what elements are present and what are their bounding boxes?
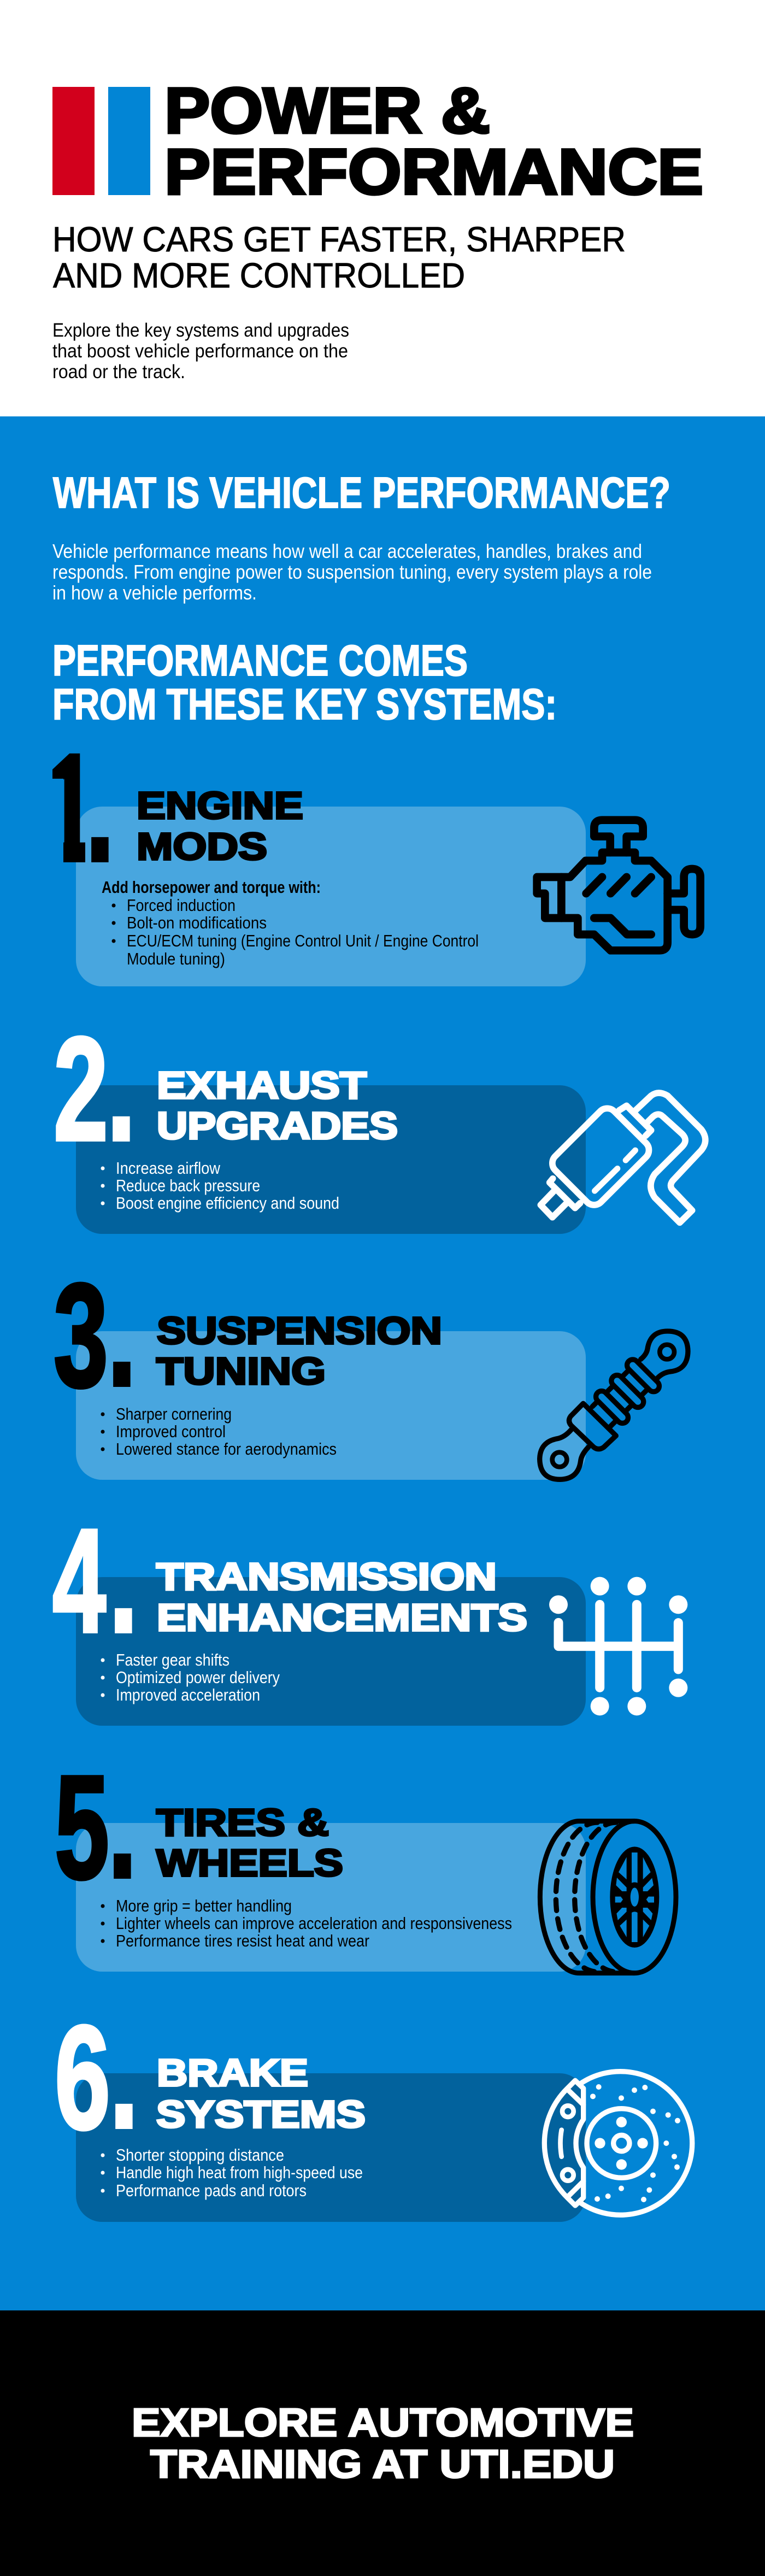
heading: transmission enhancements: [156, 1555, 527, 1639]
footer band: [0, 2310, 765, 2576]
suspension text: Sharper cornering: [116, 1404, 232, 1424]
title: [164, 75, 703, 208]
heading: engine mods: MODS: [137, 825, 267, 868]
engine text: ECU/ECM tuning (Engine Control Unit / Engine Control: [127, 931, 479, 950]
engine text: Bolt-on modifications: [127, 913, 267, 932]
transmission text: [101, 1650, 280, 1704]
heading: engine mods: ENGINE: [137, 784, 303, 827]
subtitle: AND MORE CONTROLLED: [53, 256, 465, 295]
heading: brake systems: BRAKE: [157, 2051, 308, 2094]
heading: key systems: FROM THESE KEY SYSTEMS:: [52, 680, 557, 728]
brakes text: [101, 2145, 363, 2200]
panel: suspension tuning: [54, 1233, 688, 1480]
blue main panel: [0, 416, 765, 2310]
tires text: [101, 1896, 512, 1950]
number 5: .: [105, 1725, 139, 1915]
number 3: 3: [54, 1254, 108, 1418]
intro text: road or the track.: [52, 361, 185, 383]
call to action: [132, 2401, 634, 2486]
panel: tires and wheels: [55, 1725, 676, 1973]
definition text: responds. From engine power to suspension tuning, every system plays a role: [52, 561, 652, 583]
engine text: Forced induction: [127, 896, 236, 915]
subtitle: [52, 220, 626, 295]
exhaust text: Increase airflow: [116, 1158, 221, 1178]
icon: engine: [537, 820, 701, 950]
suspension text: Improved control: [116, 1422, 226, 1441]
panel: engine mods: [52, 753, 704, 986]
intro text: [52, 320, 349, 383]
definition text: [52, 540, 652, 604]
heading: exhaust upgrades: EXHAUST: [157, 1064, 367, 1107]
number 1: 1: [45, 723, 95, 893]
number 4: 4: [52, 1499, 107, 1663]
icon: gear shifter: [549, 1577, 687, 1715]
brakes text: Handle high heat from high-speed use: [116, 2163, 363, 2182]
number 2: 2: [54, 1007, 108, 1172]
heading: suspension tuning: TUNING: [156, 1350, 326, 1392]
number 6: .: [107, 1975, 141, 2165]
title: POWER &: [164, 75, 490, 147]
heading: key systems: [52, 636, 557, 728]
tires text: Performance tires resist heat and wear: [116, 1931, 369, 1950]
heading: transmission enhancements: ENHANCEMENTS: [157, 1596, 527, 1639]
number 6: 6: [55, 1996, 110, 2160]
heading: tires and wheels: [156, 1801, 343, 1884]
suspension text: Lowered stance for aerodynamics: [116, 1439, 337, 1458]
exhaust text: Boost engine efficiency and sound: [116, 1193, 339, 1213]
number 1: [52, 753, 109, 862]
heading: brake systems: SYSTEMS: [156, 2093, 366, 2136]
heading: tires and wheels: WHEELS: [156, 1842, 343, 1884]
transmission text: Optimized power delivery: [116, 1668, 280, 1687]
call to action: EXPLORE AUTOMOTIVE: [132, 2401, 634, 2445]
exhaust text: Reduce back pressure: [116, 1176, 260, 1195]
call to action: TRAINING AT UTI.EDU: [150, 2443, 615, 2486]
transmission text: Improved acceleration: [116, 1685, 260, 1704]
panel: transmission enhancements: [52, 1480, 687, 1726]
icon: shock absorber: [540, 1331, 688, 1479]
definition text: in how a vehicle performs.: [52, 581, 257, 604]
panel: exhaust upgrades: [54, 988, 705, 1234]
header panel: [0, 0, 765, 416]
icon: tire: [540, 1821, 676, 1973]
heading: engine mods: [137, 784, 303, 868]
number 1: .: [83, 709, 117, 898]
definition text: Vehicle performance means how well a car accelerates, handles, brakes and: [52, 540, 642, 562]
heading: brake systems: [156, 2051, 366, 2136]
intro text: that boost vehicle performance on the: [52, 340, 348, 362]
heading: exhaust upgrades: UPGRADES: [157, 1104, 398, 1147]
intro text: Explore the key systems and upgrades: [52, 320, 349, 341]
heading: suspension tuning: [156, 1309, 442, 1392]
transmission text: Faster gear shifts: [116, 1650, 229, 1669]
number 5: 5: [55, 1745, 109, 1910]
engine text: Module tuning): [127, 949, 225, 968]
number 3: .: [105, 1233, 139, 1423]
brakes text: Performance pads and rotors: [116, 2181, 307, 2200]
icon: brake disc: [544, 2072, 692, 2215]
heading: suspension tuning: SUSPENSION: [157, 1309, 442, 1352]
number 2: .: [104, 988, 138, 1178]
engine text: [102, 878, 479, 968]
brakes text: Shorter stopping distance: [116, 2145, 284, 2165]
heading: tires and wheels: TIRES &: [156, 1801, 329, 1844]
engine text: Add horsepower and torque with:: [102, 878, 321, 897]
logo stripes: [52, 87, 150, 195]
heading: transmission enhancements: TRANSMISSION: [156, 1555, 497, 1598]
tires text: More grip = better handling: [116, 1896, 292, 1915]
title: PERFORMANCE: [164, 136, 703, 208]
tires text: Lighter wheels can improve acceleration and responsiveness: [116, 1914, 512, 1933]
panel: brake systems: [55, 1975, 692, 2222]
heading: exhaust upgrades: [157, 1064, 398, 1147]
suspension text: [101, 1404, 337, 1458]
subtitle: HOW CARS GET FASTER, SHARPER: [52, 220, 626, 259]
heading: key systems: PERFORMANCE COMES: [52, 636, 468, 685]
icon: exhaust: [540, 1093, 705, 1222]
number 4: .: [107, 1480, 140, 1669]
exhaust text: [101, 1158, 339, 1213]
